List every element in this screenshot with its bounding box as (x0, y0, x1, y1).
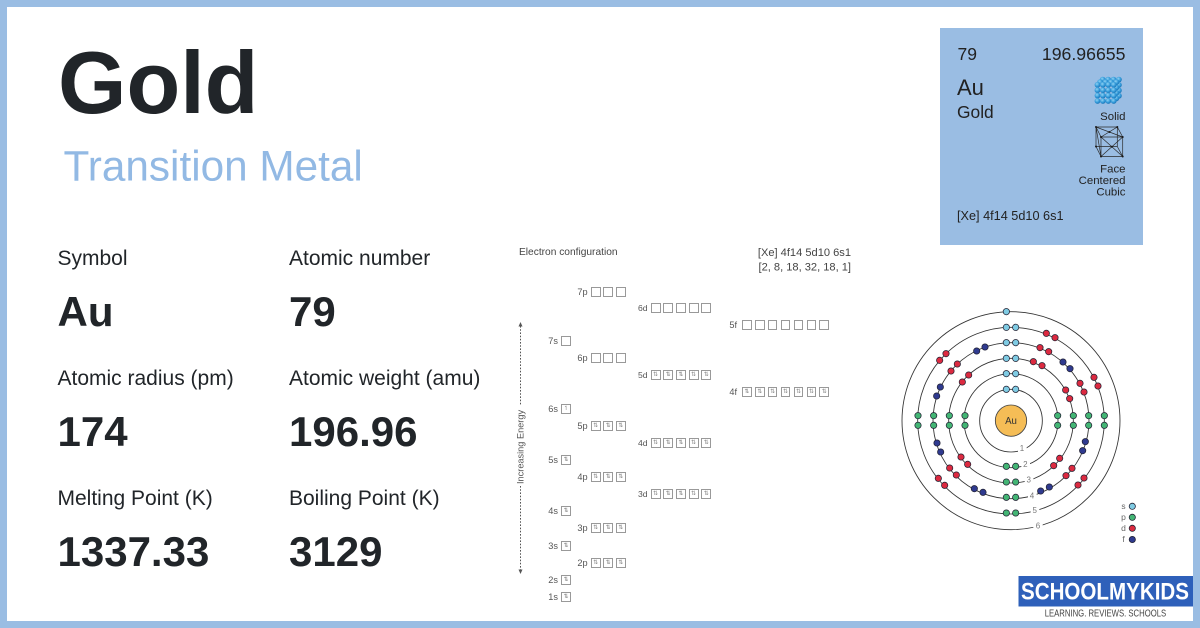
orbital 4d: ⇅ (678, 438, 683, 446)
orbital 5d (638, 370, 711, 380)
orbital 4d: ⇅ (653, 438, 658, 446)
property: symbol: Au (58, 288, 114, 335)
orbital energy diagram: 4d (638, 438, 648, 448)
orbital energy diagram: 3s (548, 540, 558, 550)
orbital 5d: ⇅ (691, 370, 696, 378)
orbital 4p: ⇅ (606, 473, 611, 480)
atomic mass: 196.96655 (1042, 44, 1126, 64)
orbital 3p: ⇅ (606, 524, 611, 531)
panel: element card (940, 28, 1143, 245)
orbital 2s: ⇅ (563, 576, 569, 582)
orbital energy diagram: 5d (638, 370, 648, 380)
orbital 3s (548, 540, 571, 551)
orbital energy diagram: 6p (577, 352, 588, 362)
orbital energy diagram: 2p (577, 558, 588, 568)
subtitle: category: Transition Metal (64, 142, 363, 190)
f electrons (933, 344, 1088, 495)
orbital 4f: ⇅ (796, 388, 801, 395)
electron configuration heading: Electron configuration (519, 247, 618, 258)
orbital 3s: ⇅ (563, 542, 569, 548)
configuration summary: [Xe] 4f14 5d10 6s1 (758, 247, 851, 259)
shell numbers: 3 (1026, 475, 1031, 484)
orbital 6s: ↿ (563, 405, 569, 412)
orbital 7p (577, 287, 626, 297)
orbital 2p: ⇅ (593, 558, 598, 566)
nucleus (995, 405, 1027, 436)
orbital 5s: ⇅ (563, 456, 569, 463)
shell numbers: 1 (1020, 444, 1025, 453)
orbital energy diagram: 2s (548, 574, 558, 584)
orbital 5p: ⇅ (593, 422, 598, 429)
atomic number: 79 (958, 44, 977, 64)
orbital 5f (729, 320, 829, 330)
orbital 4d: ⇅ (666, 438, 671, 446)
orbital energy diagram: 7s (548, 336, 558, 346)
legend: orbital types: s (1121, 501, 1126, 511)
s electrons (1003, 308, 1019, 392)
orbital energy diagram: 3d (638, 489, 648, 499)
orbital 3d: ⇅ (691, 490, 696, 497)
property: symbol (58, 247, 128, 335)
logo: SchoolMyKids (1018, 576, 1193, 620)
property: melting point: 1337.33 (58, 528, 209, 575)
property: boiling point (289, 487, 440, 575)
orbital 5p (577, 421, 626, 431)
orbital 1s (548, 592, 571, 602)
orbital 5d: ⇅ (653, 370, 658, 378)
Bohr atom diagram (902, 308, 1120, 531)
orbital 3p: ⇅ (618, 524, 623, 531)
orbital 4p (577, 472, 626, 482)
shell numbers: 5 (1032, 506, 1037, 515)
arrow: increasing energy axis: Increasing Energy (516, 410, 526, 484)
legend: orbital types: f (1122, 534, 1125, 544)
legend: orbital types: p (1121, 512, 1126, 522)
orbital energy diagram: 4p (577, 472, 588, 482)
orbital 3d: ⇅ (678, 490, 683, 497)
orbital 4p: ⇅ (593, 473, 598, 480)
property: boiling point: Boiling Point (K) (289, 487, 440, 510)
icon: solid lattice (1095, 77, 1122, 104)
orbital 2p: ⇅ (618, 558, 623, 566)
orbital 4s (548, 506, 571, 516)
orbital 3d: ⇅ (653, 490, 658, 497)
orbital energy diagram: 5s (548, 455, 558, 465)
element symbol: Au (957, 75, 984, 100)
orbital 4f (729, 387, 829, 397)
shell numbers: 4 (1030, 491, 1035, 500)
property: atomic weight (289, 367, 480, 455)
legend: orbital types (1121, 501, 1135, 544)
orbital 4d (638, 438, 711, 448)
orbital 3p: ⇅ (593, 524, 598, 531)
orbital 4f: ⇅ (783, 388, 788, 395)
orbital 5p: ⇅ (606, 422, 611, 429)
configuration summary: [2, 8, 18, 32, 18, 1] (758, 262, 851, 274)
orbital 5p: ⇅ (618, 422, 623, 429)
orbital energy diagram: 1s (548, 592, 558, 602)
orbital 5s (548, 455, 571, 465)
orbital 1s: ⇅ (563, 592, 569, 600)
orbital 3p (577, 523, 626, 533)
electron shells (902, 312, 1120, 530)
property: atomic weight: 196.96 (289, 408, 417, 455)
orbital energy diagram: 3p (577, 523, 588, 533)
orbital 6d (638, 303, 711, 313)
shell numbers (1018, 443, 1043, 531)
nucleus: Au (1005, 416, 1017, 427)
icon: face centered cubic cell (1095, 126, 1124, 158)
d electrons (935, 330, 1101, 488)
orbital 2p: ⇅ (606, 558, 611, 566)
property: atomic radius (58, 367, 234, 455)
property: melting point (58, 487, 213, 575)
orbital 4f: ⇅ (770, 388, 775, 395)
orbital 4d: ⇅ (704, 438, 709, 446)
title: Gold (58, 33, 258, 132)
orbital energy diagram: 7p (577, 287, 588, 297)
orbital 4f: ⇅ (809, 388, 814, 395)
crystal structure label: Centered (1079, 175, 1126, 187)
orbital 5d: ⇅ (704, 370, 709, 378)
property: melting point: Melting Point (K) (58, 487, 213, 510)
orbital 4d: ⇅ (691, 438, 696, 446)
orbital energy diagram: 4f (729, 387, 737, 397)
orbital 7s (548, 336, 571, 346)
orbital 4f: ⇅ (757, 388, 762, 395)
orbital energy diagram: 4s (548, 506, 558, 516)
orbital energy diagram: 5p (577, 421, 588, 431)
orbital 5d: ⇅ (678, 370, 683, 378)
legend: orbital types: d (1121, 523, 1126, 533)
p electrons (915, 412, 1107, 516)
orbital 5d: ⇅ (666, 370, 671, 378)
orbital 6p (577, 352, 626, 363)
property: symbol: Symbol (58, 247, 128, 270)
orbital 3d: ⇅ (666, 490, 671, 497)
property: atomic weight: Atomic weight (amu) (289, 367, 480, 390)
shell numbers: 2 (1023, 460, 1028, 469)
orbital 4f: ⇅ (822, 388, 827, 395)
property: atomic number: Atomic number (289, 247, 430, 270)
orbital 4s: ⇅ (563, 507, 569, 514)
property: atomic radius: Atomic radius (pm) (58, 367, 234, 390)
crystal structure label: Face (1100, 164, 1126, 176)
property: boiling point: 3129 (289, 528, 382, 575)
orbital energy diagram: 6d (638, 303, 648, 313)
phase label: Solid (1100, 111, 1126, 123)
card electron configuration: [Xe] 4f14 5d10 6s1 (957, 209, 1064, 223)
orbital 4p: ⇅ (618, 473, 623, 480)
crystal structure label: Cubic (1096, 187, 1126, 199)
orbital 3d: ⇅ (704, 490, 709, 497)
orbital energy diagram: 5f (729, 320, 737, 330)
orbital energy diagram: 6s (548, 404, 558, 414)
orbital 2p (577, 558, 626, 568)
property: atomic number: 79 (289, 288, 336, 335)
orbital 4f: ⇅ (744, 388, 749, 395)
element name: Gold (957, 102, 994, 122)
orbital 6s (548, 404, 571, 414)
orbital 3d (638, 489, 711, 499)
property: atomic radius: 174 (58, 408, 128, 455)
orbital 2s (548, 574, 571, 585)
configuration summary (758, 247, 851, 274)
property: atomic number (289, 247, 430, 335)
shell numbers: 6 (1036, 521, 1041, 530)
arrow: increasing energy axis (516, 322, 526, 574)
